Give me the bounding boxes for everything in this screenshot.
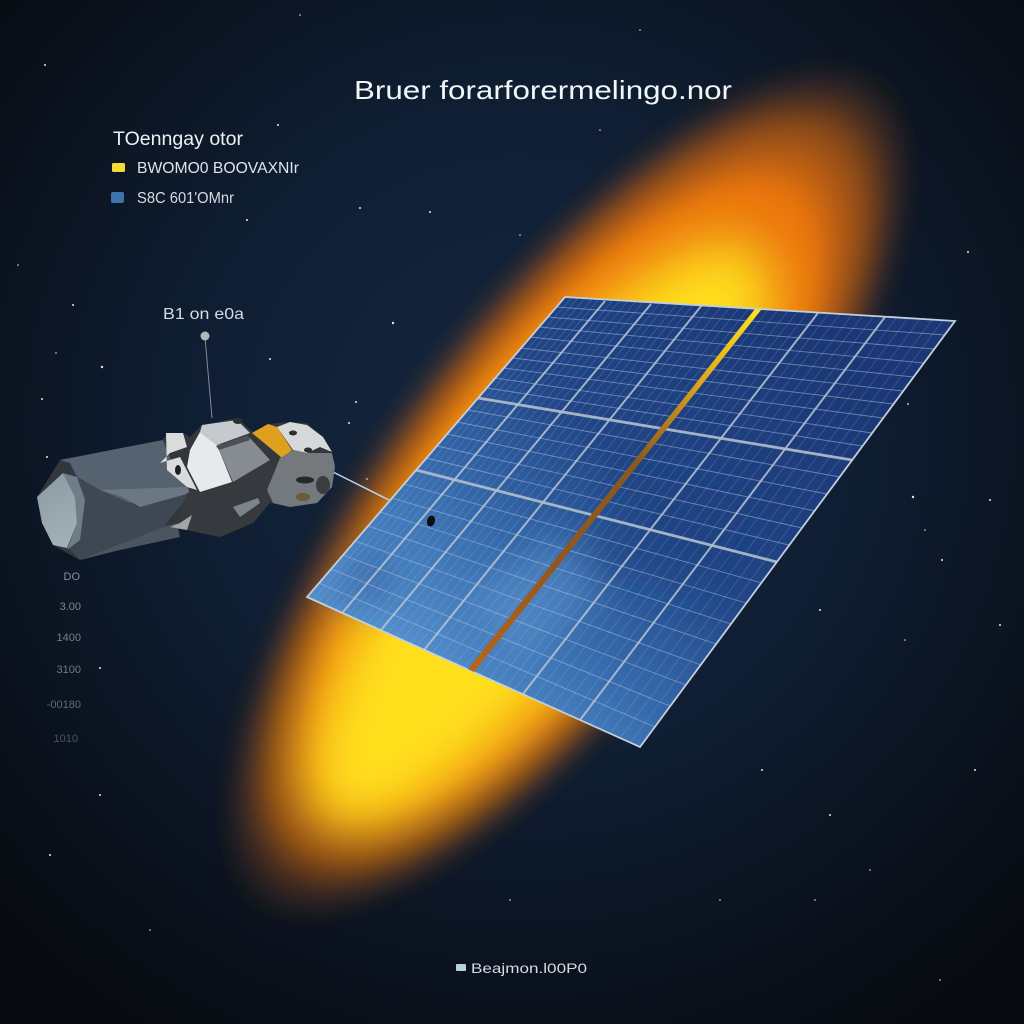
scale numbers: 3100: [57, 664, 81, 676]
legend label: yellow: BWOMO0 BOOVAXNIr: [137, 160, 300, 177]
satellite: end cap: [37, 473, 77, 548]
panel: row lines: [319, 307, 945, 727]
satellite: rear cylinder: [60, 440, 190, 560]
panel: central seam: [468, 309, 761, 672]
satellite: central dark module: [170, 460, 280, 537]
callout leader line: [205, 337, 212, 418]
panel: major row lines: [416, 398, 852, 562]
scale numbers: -00180: [47, 699, 81, 711]
callout text: B1 on e0a: [163, 306, 244, 323]
scale numbers: 1400: [57, 632, 81, 644]
scale numbers: DO: [64, 571, 80, 583]
connector arm: satellite to panel: [325, 468, 391, 501]
legend title: TOenngay otor: [113, 129, 244, 150]
satellite: gold foil module: [252, 424, 292, 458]
scale numbers: 3.00: [60, 601, 81, 613]
legend swatch: yellow: [112, 163, 125, 172]
callout: satellite label with pin: [163, 306, 244, 418]
scale numbers: 1010: [54, 733, 78, 745]
panel: outer frame: [307, 297, 955, 747]
satellite: front section: [267, 422, 335, 507]
panel: shading patches: [320, 470, 760, 660]
panel: thin cell dividers: [313, 297, 943, 743]
legend: [111, 129, 300, 207]
legend swatch: blue: [111, 192, 124, 203]
panel: cell surface: [307, 297, 955, 747]
legend label: blue: S8C 601'OMnr: [137, 190, 235, 207]
title: Bruer forarforermelingo.nor: [354, 75, 732, 105]
satellite: central white body: [160, 418, 270, 492]
footer swatch: [456, 964, 466, 971]
footer label: Beajmon.l00P0: [471, 960, 587, 976]
satellite: [37, 418, 335, 560]
panel: major column lines: [343, 301, 885, 720]
solar panel: [307, 297, 955, 747]
footer legend: [456, 960, 587, 976]
scale numbers: [47, 571, 81, 745]
satellite: dark silhouette: [37, 418, 335, 560]
callout pin: [200, 332, 210, 340]
panel: puncture mark: [426, 515, 436, 527]
